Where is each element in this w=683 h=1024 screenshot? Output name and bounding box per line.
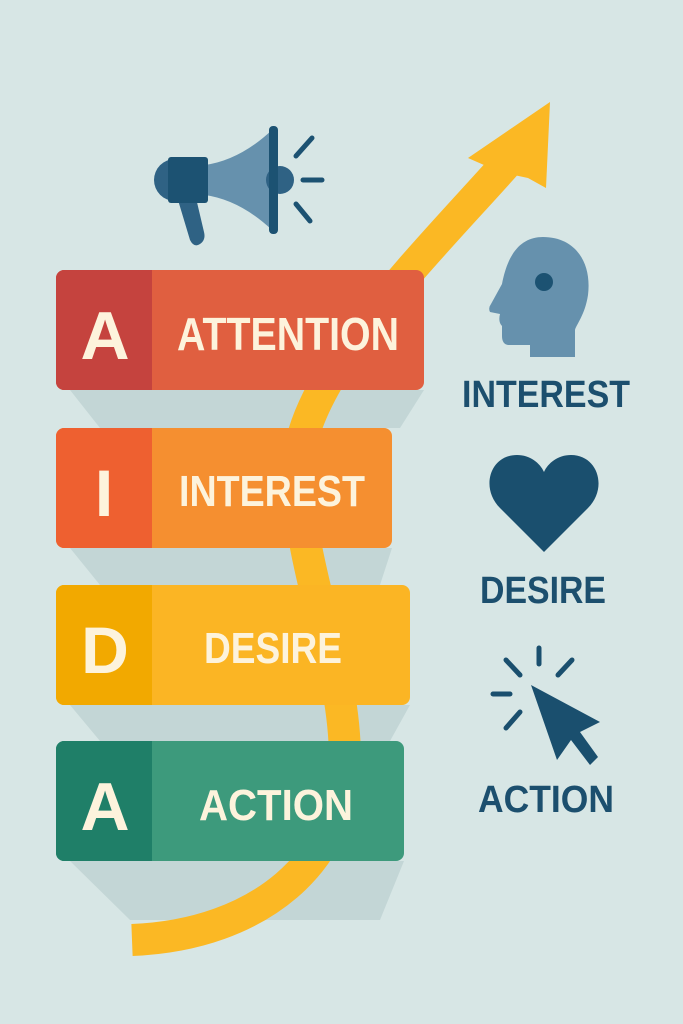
bar: action (56, 741, 404, 861)
icon: heart (489, 455, 599, 552)
shadows (70, 390, 424, 920)
bar: desire: DESIRE (204, 624, 342, 673)
bar: action: A (80, 769, 130, 845)
label: interest: INTEREST (462, 374, 630, 416)
icon: head (489, 237, 589, 357)
bar: interest (56, 428, 392, 548)
bar: interest: I (95, 456, 113, 530)
bar: attention: A (80, 298, 130, 374)
bar: desire: D (81, 613, 129, 687)
bar: action: ACTION (199, 781, 353, 830)
icon: cursor (493, 648, 600, 765)
bar: desire (56, 585, 410, 705)
bar: attention (56, 270, 424, 390)
icon: megaphone (154, 126, 322, 245)
bar: interest: INTEREST (179, 467, 365, 516)
arrow: growth path (132, 102, 550, 940)
bar: attention: ATTENTION (177, 308, 399, 360)
label: action: ACTION (478, 779, 614, 821)
label: desire: DESIRE (480, 570, 606, 612)
